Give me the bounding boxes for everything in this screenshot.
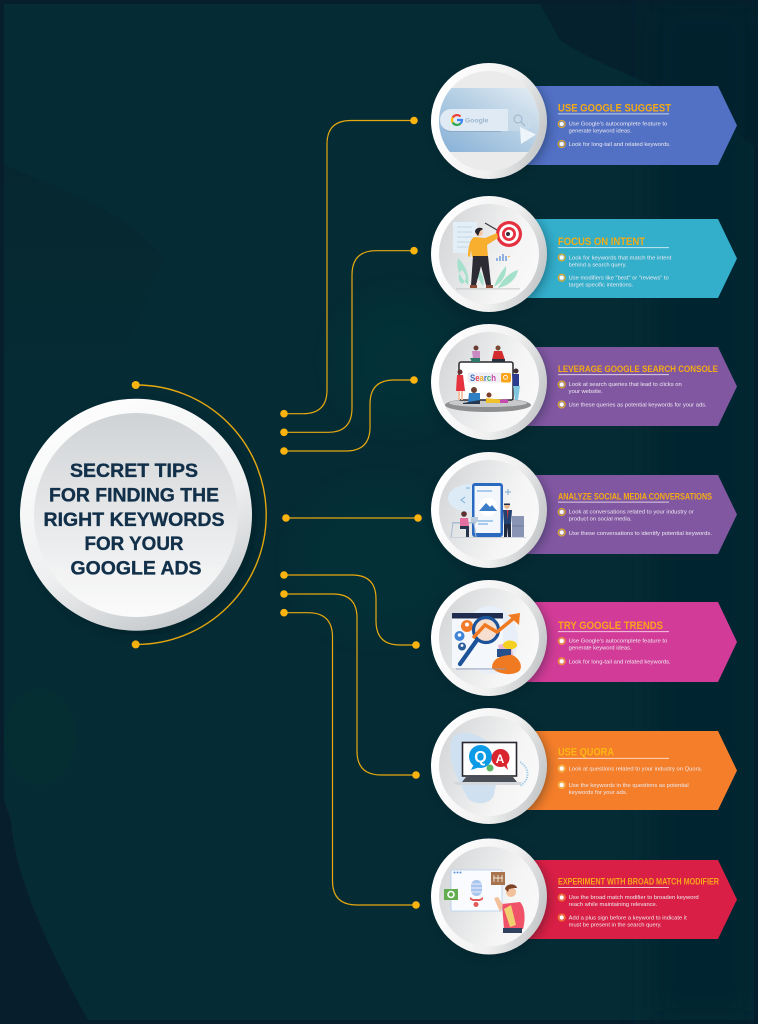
ribbon [520,86,737,165]
heading: TRY GOOGLE TRENDS [558,620,663,632]
heading: FOCUS ON INTENT [558,236,645,248]
bullet list [558,765,703,796]
panel: analyze social media conversations [431,452,737,571]
circle [433,199,549,315]
bullet list: Look at questions related to your industry on Quora. [569,767,703,773]
circle [433,842,549,958]
icon: laptop with q and a: A [496,752,505,766]
ribbon [520,219,737,298]
panel: experiment with broad match modifier [431,838,737,958]
ribbon [520,860,737,939]
circle [433,455,549,571]
bullet list: Look for long-tail and related keywords. [569,142,671,148]
heading: USE QUORA [558,746,614,758]
bullet list: must be present in the search query. [569,922,662,928]
heading: ANALYZE SOCIAL MEDIA CONVERSATIONS [558,491,712,501]
heading: LEVERAGE GOOGLE SEARCH CONSOLE [558,364,718,375]
search word: Search [470,373,496,383]
icon: laptop with q and a [450,733,528,803]
ribbon [520,475,737,554]
bullet list [558,120,671,148]
icon: google search bar [437,88,541,152]
bullet list [558,381,707,408]
panel: use google suggest [431,63,737,182]
circle [433,711,549,827]
title text [44,461,224,580]
bullet list: generate keyword ideas. [569,128,632,134]
icon: google search bar: Google [465,117,489,124]
bullet list [558,638,671,665]
bullet list: Use these queries as potential keywords for your ads. [569,402,707,408]
icon: magnifier with trend arrow [452,606,521,674]
bullet list [558,254,672,289]
bullet list: Add a plus sign before a keyword to indicate it [569,915,687,921]
panel: try google trends [431,580,737,699]
central title circle [20,399,257,636]
bullet list: Look for keywords that match the intent [569,255,672,261]
title text: FOR FINDING THE [49,486,219,506]
bullet list: Use these conversations to identify potential keywords. [569,531,712,537]
icon: phone with people [448,483,526,538]
panel: leverage google search console [431,324,737,443]
bullet list: Look at conversations related to your industry or [569,510,694,516]
bullet list: reach while maintaining relevance. [569,902,658,908]
connector lines from title to tips [136,120,418,905]
ribbon [520,602,737,682]
bullet list: Use the broad match modifier to broaden keyword [569,895,699,901]
icon: microphone window and presenter [444,870,525,933]
ribbon [520,347,737,426]
ribbon [520,731,737,810]
bullet list: Use modifiers like "best" or "reviews" to [569,276,669,282]
heading: EXPERIMENT WITH BROAD MATCH MODIFIER [558,876,719,886]
panel: focus on intent [431,196,737,315]
circle [433,583,549,699]
bullet list: Use Google's autocomplete feature to [569,639,667,645]
title text: FOR YOUR [84,534,184,555]
circle [433,66,549,182]
connector dots [132,117,422,909]
circle [433,327,549,443]
bullet list: target specific intentions. [569,283,634,289]
bullet list: keywords for your ads. [569,790,628,796]
title text: GOOGLE ADS [70,558,202,580]
icon: person aiming at target [453,221,522,289]
bullet list: product on social media. [569,517,632,523]
bullet list: Use the keywords in the questions as potential [569,783,689,789]
title text: SECRET TIPS [70,461,198,482]
bullet list: Look for long-tail and related keywords. [569,659,671,665]
bullet list: Use Google's autocomplete feature to [569,122,667,128]
bullet list: your website. [569,389,603,395]
bullet list: Look at search queries that lead to clicks on [569,382,682,388]
title text: RIGHT KEYWORDS [44,510,224,531]
panel: use quora [431,708,737,827]
bullet list: behind a search query. [569,262,627,268]
icon: people around search screen [445,346,531,412]
q and a letters: Q [474,749,487,766]
heading: USE GOOGLE SUGGEST [558,102,671,114]
bullet list: generate keyword ideas. [569,646,632,652]
bullet list [558,894,699,928]
bullet list [558,508,712,537]
